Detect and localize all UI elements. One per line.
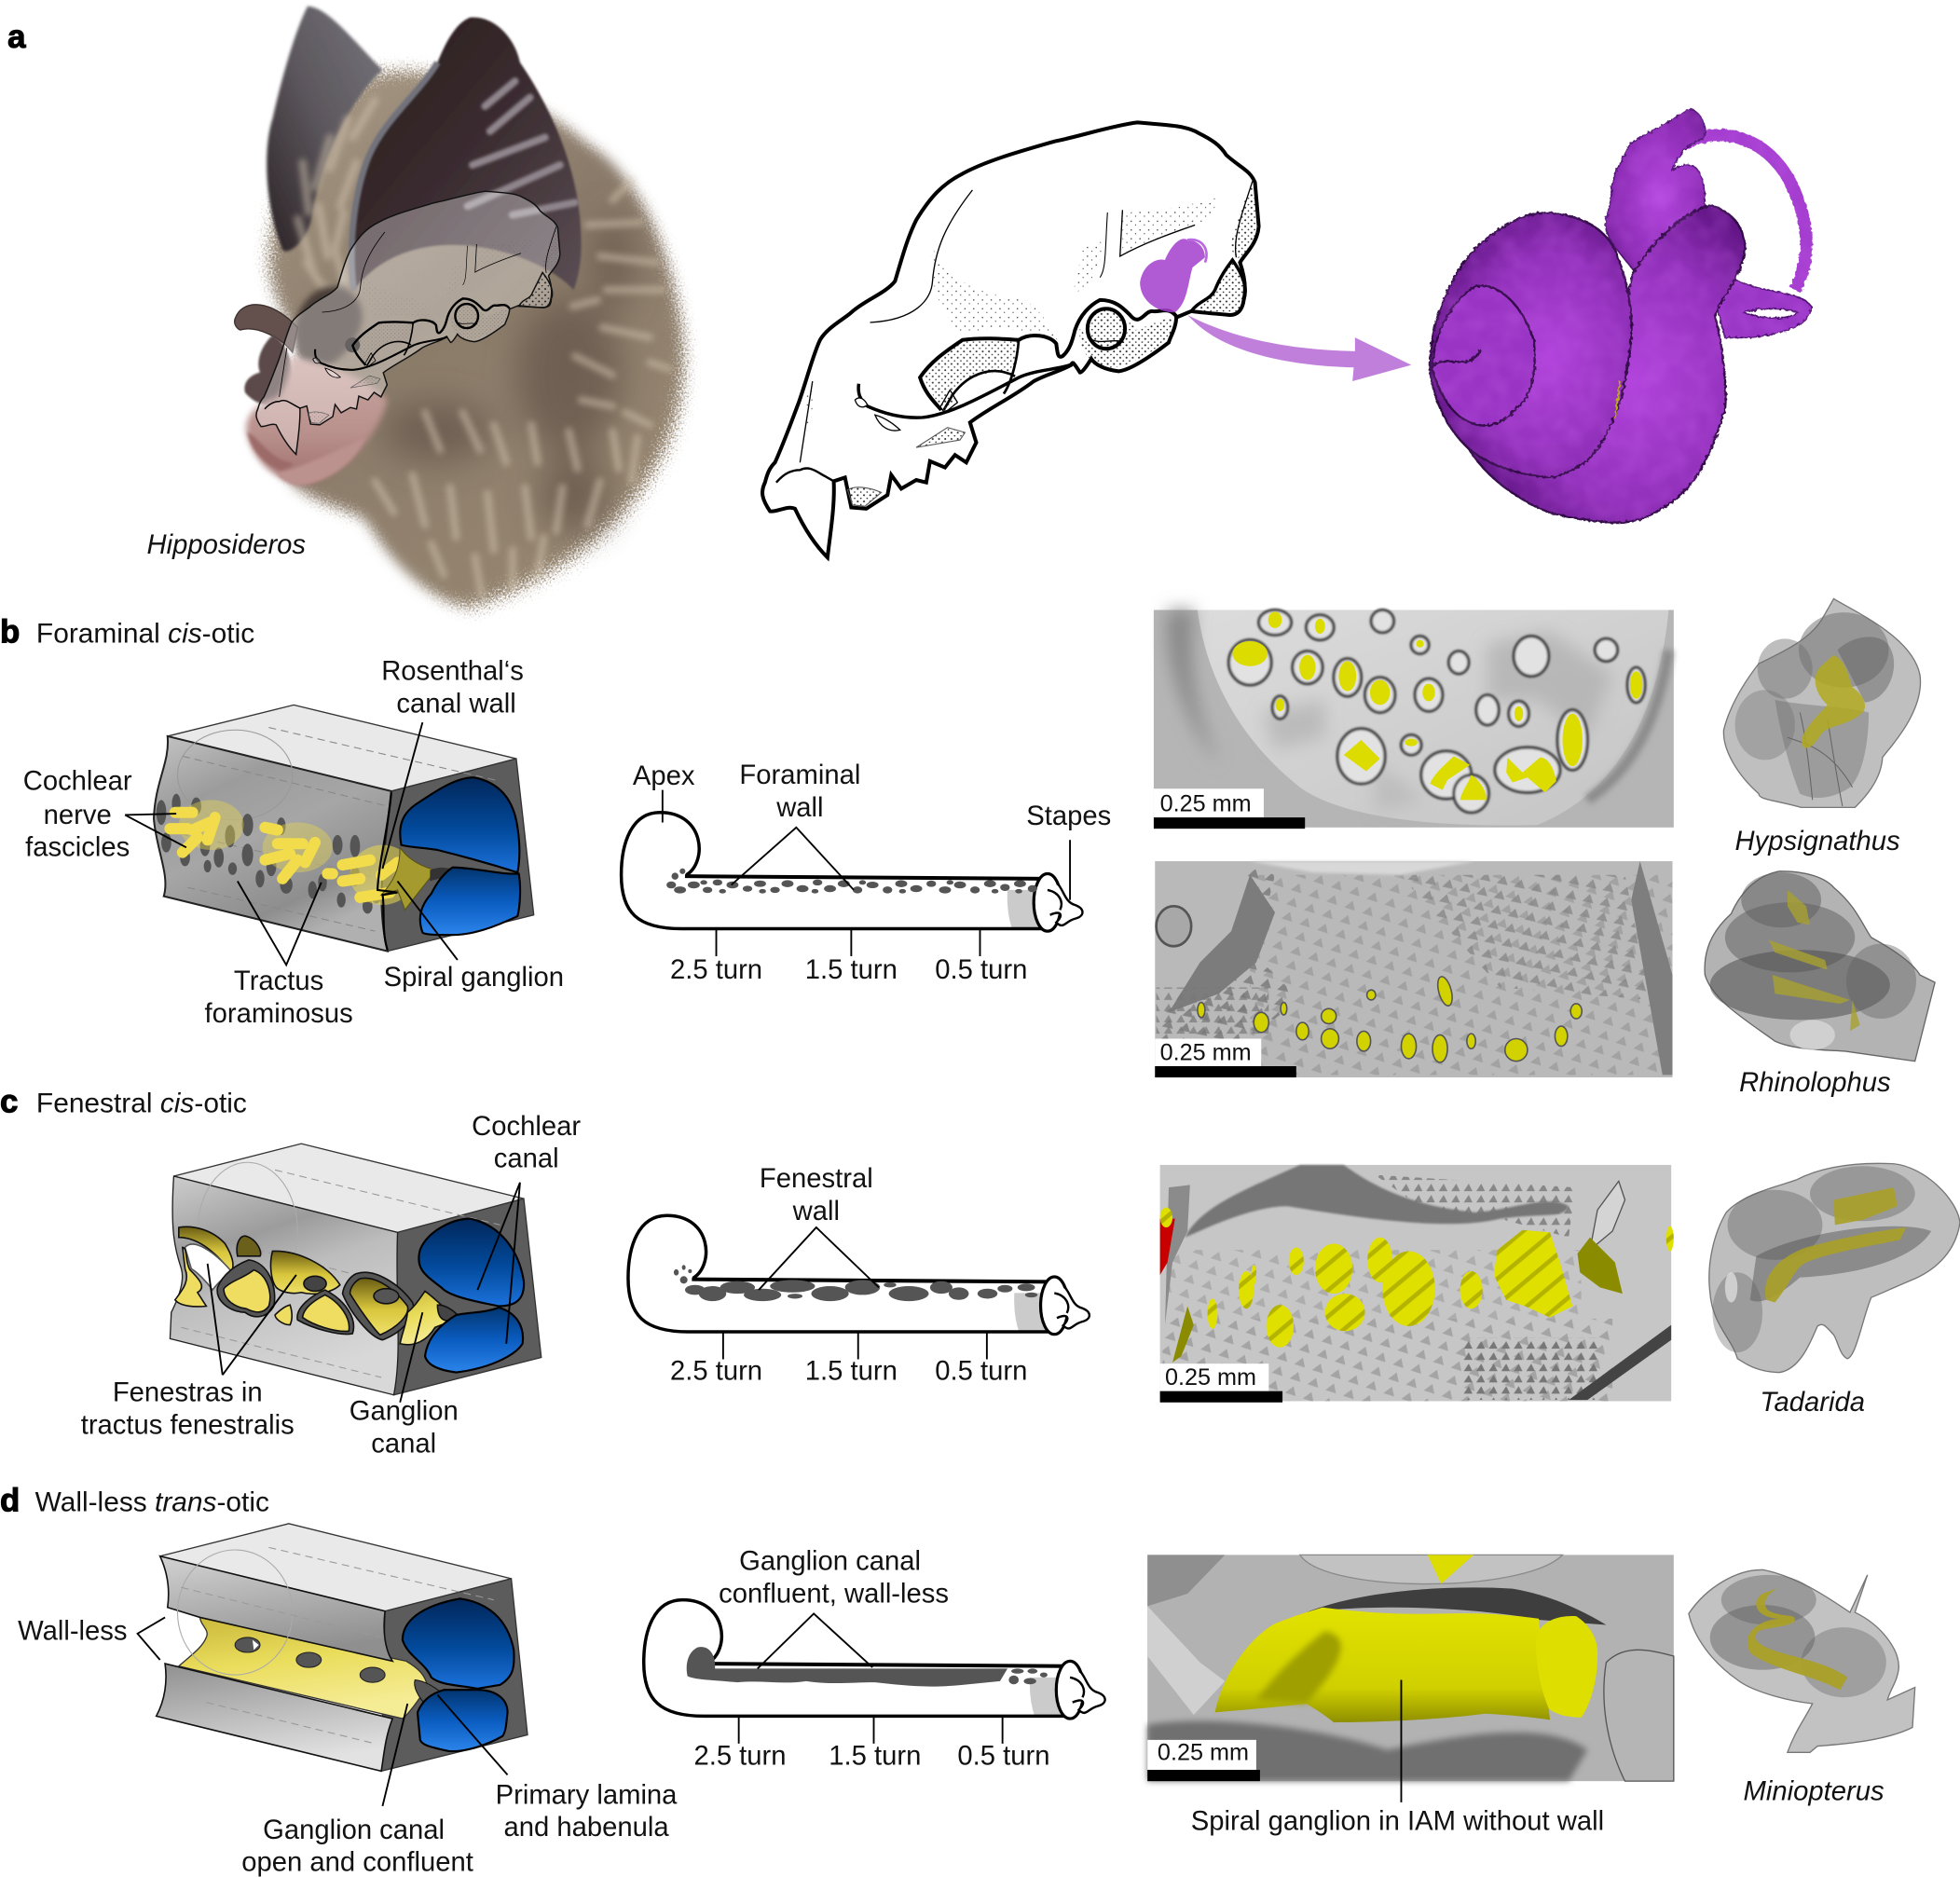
micro-CT render: Miniopterus surface [1147, 1555, 1674, 1781]
labels panel d block: Ganglion canal [263, 1815, 445, 1845]
labels panel d block [18, 1617, 678, 1877]
right face [394, 1199, 541, 1395]
ganglion canal yellow [179, 1617, 428, 1719]
labels tube b: Apex [633, 761, 695, 791]
panel heading c: Fenestral [36, 1089, 160, 1119]
cochlear canal blue lobes [403, 1598, 514, 1689]
panel heading b: b [0, 613, 20, 650]
panel heading c: cis-otic [160, 1089, 247, 1119]
top face [173, 1144, 524, 1232]
labels panel c block: canal [371, 1429, 436, 1459]
yellow spiral ganglion [1802, 655, 1865, 748]
leader lines panel d [138, 1617, 508, 1806]
panel heading b: cis-otic [168, 618, 254, 649]
top face [160, 1524, 512, 1611]
transparent cochlea: Hypsignathus [1723, 598, 1921, 807]
right face [381, 1579, 528, 1771]
micro-CT render: Tadarida surface: 0.25 mm [1165, 1364, 1256, 1391]
labels panel b block: foraminosus [205, 999, 353, 1029]
panel label a: a [7, 19, 26, 55]
scale bar [1155, 1038, 1261, 1066]
eye region [295, 286, 363, 375]
labels panel c block: Fenestras in [113, 1377, 263, 1407]
illustration: bat head with skull overlay [235, 7, 684, 608]
scale bar [1147, 1740, 1256, 1770]
foramina dots [667, 870, 1036, 893]
surface shading [1263, 631, 1612, 813]
leader lines panel b [125, 722, 663, 965]
left ear [267, 7, 382, 252]
leader lines tube b [732, 828, 1070, 900]
yellow ganglia [1198, 975, 1582, 1062]
yellow spiral ganglion [1765, 1187, 1906, 1302]
diagram: foraminal cochlea block [154, 705, 534, 952]
cochlear canal blue lobes [400, 777, 519, 872]
inner ear highlight in skull [1140, 239, 1205, 312]
left face [154, 736, 391, 952]
labels tube c: 0.5 turn [935, 1357, 1027, 1387]
micro-CT render: Miniopterus surface: 0.25 mm [1158, 1739, 1249, 1765]
yellow spiral ganglion [1748, 1587, 1847, 1690]
fur highlight strokes [297, 100, 669, 594]
labels panel d block: Primary lamina [496, 1780, 678, 1810]
skull overlay [256, 191, 560, 455]
faint yellow ganglion [1769, 890, 1860, 1031]
labels panel b block [23, 657, 564, 1029]
labels tube b: wall [775, 793, 824, 823]
Rosenthal canal wall outline [377, 792, 398, 950]
diagram: wall-less cochlea block [157, 1524, 528, 1771]
labels panel b block: canal wall [396, 689, 516, 719]
diagram: fenestral cochlea block [170, 1144, 541, 1395]
labels tube c: 2.5 turn [670, 1357, 762, 1387]
micro-CT render: Rhinolophus surface [1155, 861, 1672, 1077]
semicircular canal [1678, 135, 1806, 290]
labels tube d: Ganglion canal [739, 1546, 921, 1576]
labels panel b block: Tractus [234, 966, 323, 996]
upper wall [160, 1556, 392, 1661]
species label: Hipposideros: Hipposideros [147, 530, 306, 560]
panel heading d: trans-otic [155, 1487, 269, 1517]
arrow: to inner ear [1187, 315, 1411, 381]
nose leaf [235, 305, 297, 352]
yellow ganglia [1160, 1208, 1674, 1348]
skull overlay: mastoid [519, 272, 553, 308]
yellow ganglion mass [1215, 1608, 1550, 1722]
canal holes [235, 1637, 385, 1682]
left face [170, 1176, 398, 1395]
labels panel d block: open and confluent [241, 1848, 473, 1877]
micro-CT render: Hypsignathus surface: 0.25 mm [1160, 790, 1252, 816]
species label: Tadarida: Tadarida [1760, 1388, 1865, 1418]
tube diagram d [644, 1600, 1105, 1744]
lower canal loop [1715, 278, 1811, 337]
transparent cochlea: Rhinolophus [1705, 871, 1935, 1062]
labels tube b: 2.5 turn [670, 955, 762, 985]
labels panel c block: canal [494, 1144, 559, 1174]
yellow translucent ganglia [179, 800, 244, 850]
labels tube b [633, 760, 1111, 985]
transparent cochlea: Tadarida [1709, 1163, 1960, 1373]
panel heading b: Foraminal [36, 618, 168, 649]
lower wall [157, 1664, 392, 1771]
labels tube b: Stapes [1026, 801, 1111, 831]
labels panel c block: Ganglion [350, 1397, 459, 1427]
pits [1228, 610, 1645, 813]
micro-CT render: Tadarida surface [1160, 1165, 1674, 1403]
labels tube b: 1.5 turn [805, 955, 898, 985]
leader lines tube c [759, 1227, 879, 1290]
labels panel b block: Rosenthal‘s [381, 657, 524, 687]
apical coil [1432, 286, 1535, 426]
labels tube d: 2.5 turn [693, 1742, 787, 1772]
bat fur body [269, 71, 684, 608]
labels panel d block: Wall-less [18, 1617, 128, 1647]
panel heading c: c [0, 1084, 18, 1120]
labels panel b block: fascicles [25, 833, 130, 863]
labels tube d: 1.5 turn [829, 1742, 921, 1772]
tube diagram b [622, 813, 1082, 956]
panel heading d: Wall-less [35, 1487, 155, 1517]
spiral ganglion [381, 847, 453, 910]
cochlear canal blue lobes [418, 1219, 524, 1306]
fenestral patches [674, 1265, 1037, 1301]
confluent ganglion band [687, 1647, 1007, 1687]
tube diagram c [628, 1215, 1090, 1359]
scale bar [1160, 1363, 1268, 1391]
illustration: bat skull line drawing [762, 122, 1259, 557]
labels tube b: Foraminal [739, 760, 860, 790]
mastoid stipple [1191, 260, 1245, 315]
micro-CT render: Hypsignathus surface [1154, 610, 1674, 829]
labels tube c [670, 1164, 1027, 1387]
labels panel b block: Spiral ganglion [384, 963, 564, 993]
species label: Rhinolophus: Rhinolophus [1739, 1068, 1891, 1098]
leader lines panel c [208, 1183, 520, 1403]
labels panel b block: nerve [44, 801, 112, 830]
vestibule [1605, 109, 1706, 282]
labels tube c: Fenestral [760, 1164, 873, 1194]
panel heading d: d [0, 1482, 20, 1518]
remaining foramina [1008, 1668, 1048, 1684]
labels panel d block: and habenula [503, 1813, 669, 1843]
labels tube b: 0.5 turn [935, 955, 1027, 985]
leader lines tube d [758, 1613, 872, 1668]
labels tube d [693, 1546, 1050, 1772]
labels panel b block: Cochlear [23, 767, 132, 797]
right face [381, 759, 534, 952]
labels tube c: wall [792, 1197, 840, 1226]
labels panel c block: tractus fenestralis [81, 1410, 295, 1440]
leader line and label: spiral ganglion in IAM: Spiral ganglion in IAM without wall [1191, 1806, 1604, 1836]
labels tube d: 0.5 turn [957, 1742, 1050, 1772]
labels tube d: confluent, wall-less [719, 1579, 949, 1609]
muzzle [246, 356, 388, 485]
3D model: purple inner ear [1430, 109, 1811, 523]
species label: Miniopterus: Miniopterus [1744, 1776, 1885, 1806]
species label: Hypsignathus: Hypsignathus [1735, 827, 1900, 856]
foramina [157, 794, 381, 913]
fenestras [175, 1226, 458, 1345]
first coil [1430, 212, 1632, 477]
labels panel c block: Cochlear [472, 1112, 581, 1142]
top face [168, 705, 516, 791]
dark fur shading [382, 212, 633, 534]
transparent cochlea: Miniopterus [1689, 1569, 1915, 1752]
labels tube c: 1.5 turn [805, 1357, 898, 1387]
micro-CT render: Rhinolophus surface: 0.25 mm [1160, 1039, 1252, 1065]
nerve fascicles [170, 813, 398, 897]
yellow ganglia [1232, 611, 1642, 800]
labels panel c block [81, 1112, 581, 1459]
right ear [351, 18, 582, 290]
outer coil [1469, 205, 1745, 523]
scale bar [1154, 788, 1264, 817]
